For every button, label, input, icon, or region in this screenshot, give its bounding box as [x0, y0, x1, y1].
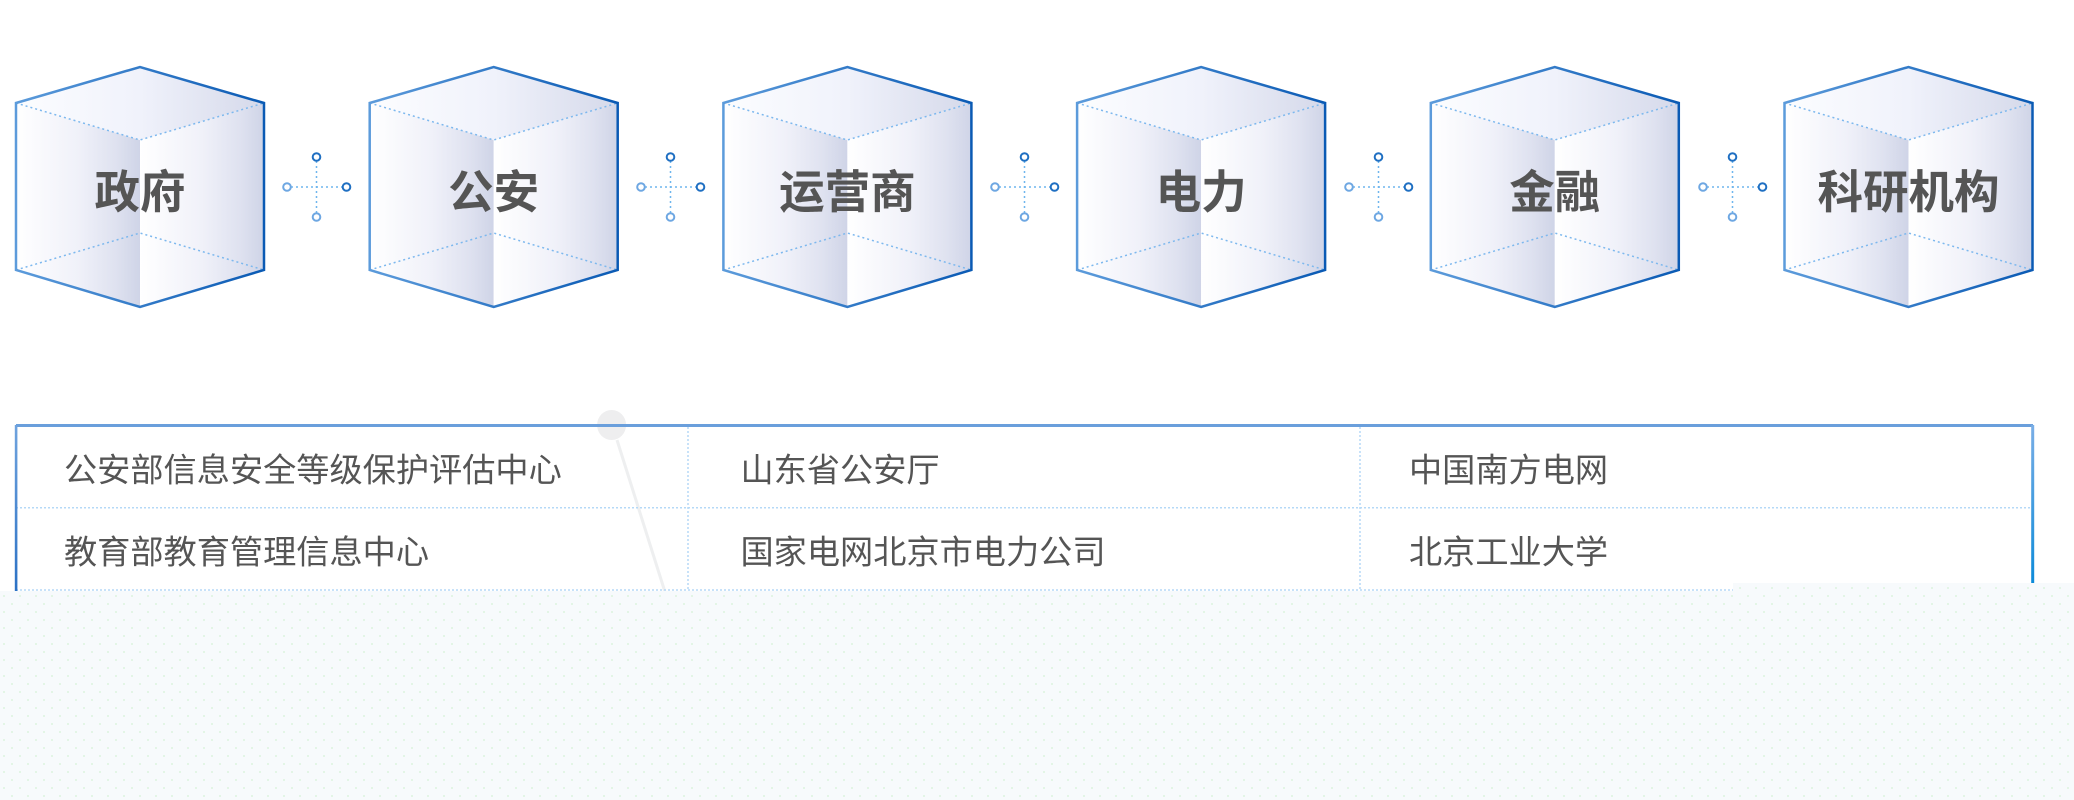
- connector 3: [991, 153, 1058, 221]
- cube: 科研机构: [1784, 67, 2032, 307]
- decorative pin behind table: [597, 410, 665, 592]
- connector 4: [1345, 153, 1412, 221]
- cube: 政府: 政府: [94, 167, 186, 218]
- cube: 金融: 金融: [1509, 167, 1600, 218]
- cube: 科研机构: 科研机构: [1817, 167, 2000, 218]
- pale dotted bottom panel: [0, 583, 2074, 800]
- row 2 text: 国家电网北京市电力公司: [740, 534, 1106, 572]
- cube: 金融: [1431, 67, 1679, 307]
- connector 2: [637, 153, 704, 221]
- cube: 公安: [370, 67, 618, 307]
- row 2 text: [64, 534, 1608, 572]
- cube: 电力: [1077, 67, 1325, 307]
- row 2 text: 教育部教育管理信息中心: [64, 534, 429, 572]
- cube: 运营商: 运营商: [779, 167, 916, 218]
- cube: 运营商: [723, 67, 971, 307]
- row 1 text: 公安部信息安全等级保护评估中心: [64, 452, 562, 490]
- cube: 电力: 电力: [1156, 167, 1247, 218]
- row 1 text: [64, 452, 1608, 490]
- row 1 text: 山东省公安厅: [740, 452, 940, 490]
- connector 5: [1699, 153, 1766, 221]
- connector 1: [283, 153, 350, 221]
- cube: 公安: 公安: [448, 167, 539, 218]
- row 1 text: 中国南方电网: [1409, 452, 1608, 490]
- cube: 政府: [16, 67, 264, 307]
- table of customers: [15, 425, 2034, 595]
- row 2 text: 北京工业大学: [1409, 534, 1608, 572]
